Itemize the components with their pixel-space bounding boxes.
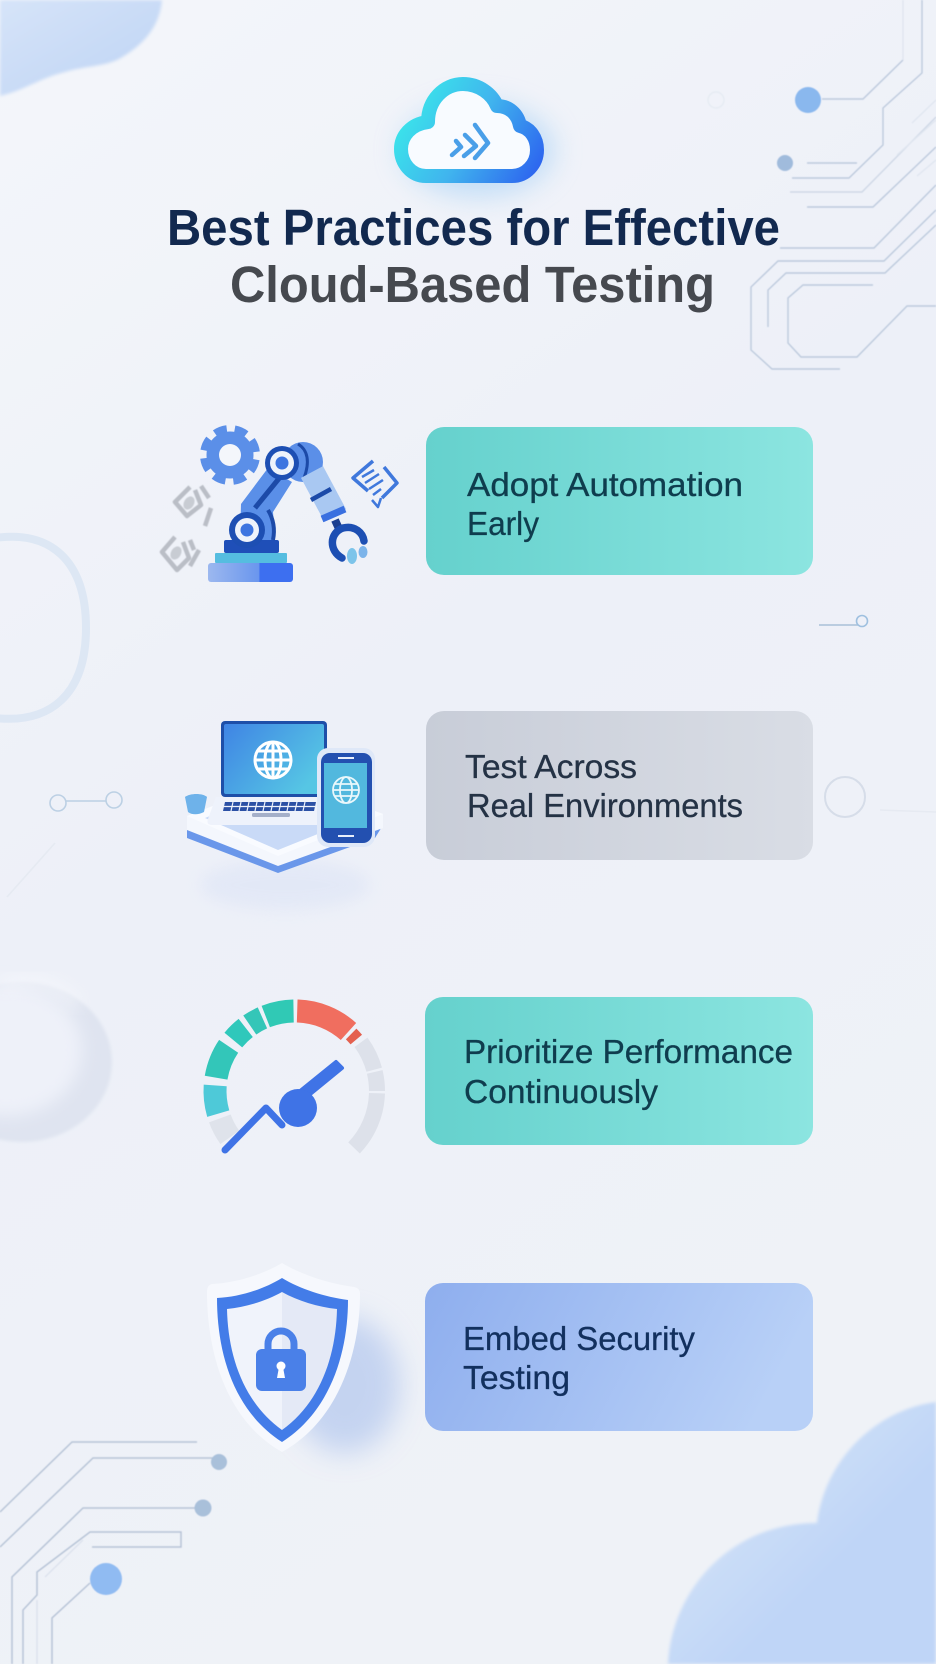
phone (317, 748, 375, 847)
panel: prioritize performance continuously: Continuously (464, 1073, 659, 1110)
panel: adopt automation early (426, 427, 813, 575)
panel: embed security testing: Embed Security (463, 1320, 695, 1357)
panel: adopt automation early: Early (467, 505, 539, 542)
robot base (208, 540, 293, 582)
shield blue border (217, 1278, 348, 1442)
panel: embed security testing: Testing (463, 1359, 570, 1396)
decoration: right nodes (819, 616, 936, 817)
icon: robot arm (201, 426, 368, 582)
icon: devices (185, 721, 383, 910)
panel: prioritize performance continuously (425, 997, 813, 1145)
shield white body (207, 1263, 360, 1452)
panel: test across real environments: Test Across (465, 748, 637, 785)
decoration: left node connector (7, 792, 122, 897)
shield inner (227, 1292, 282, 1430)
laptop (208, 721, 327, 825)
decoration: bottom-right cloud (668, 1402, 936, 1664)
decoration: left ring (0, 537, 86, 719)
panel: test across real environments: Real Environments (467, 787, 743, 824)
title: Cloud-Based Testing (230, 256, 715, 313)
icon: header cloud (401, 84, 554, 196)
icon: security shield (207, 1263, 400, 1453)
robot arm segments (229, 442, 345, 548)
decoration: left soft blob (0, 981, 112, 1142)
panel: adopt automation early: Adopt Automation (467, 466, 743, 503)
stacked platform (185, 778, 383, 873)
decoration: top-right circuit lines (708, 0, 936, 369)
title: Best Practices for Effective (167, 199, 780, 256)
decoration: bottom-left circuit lines (0, 1415, 227, 1664)
icon: grey code tags (162, 486, 211, 570)
globe on phone (333, 777, 359, 803)
robot claw (332, 527, 368, 564)
panel: embed security testing (425, 1283, 813, 1431)
title (167, 199, 780, 313)
decoration: top-left blob (0, 0, 162, 96)
globe on laptop (255, 742, 291, 778)
icon: performance gauge (180, 976, 410, 1206)
icon: gear (201, 426, 259, 484)
padlock (256, 1331, 306, 1391)
icon: code document (353, 461, 397, 507)
panel: prioritize performance continuously: Prioritize Performance (464, 1033, 793, 1070)
panel: test across real environments (426, 711, 813, 860)
